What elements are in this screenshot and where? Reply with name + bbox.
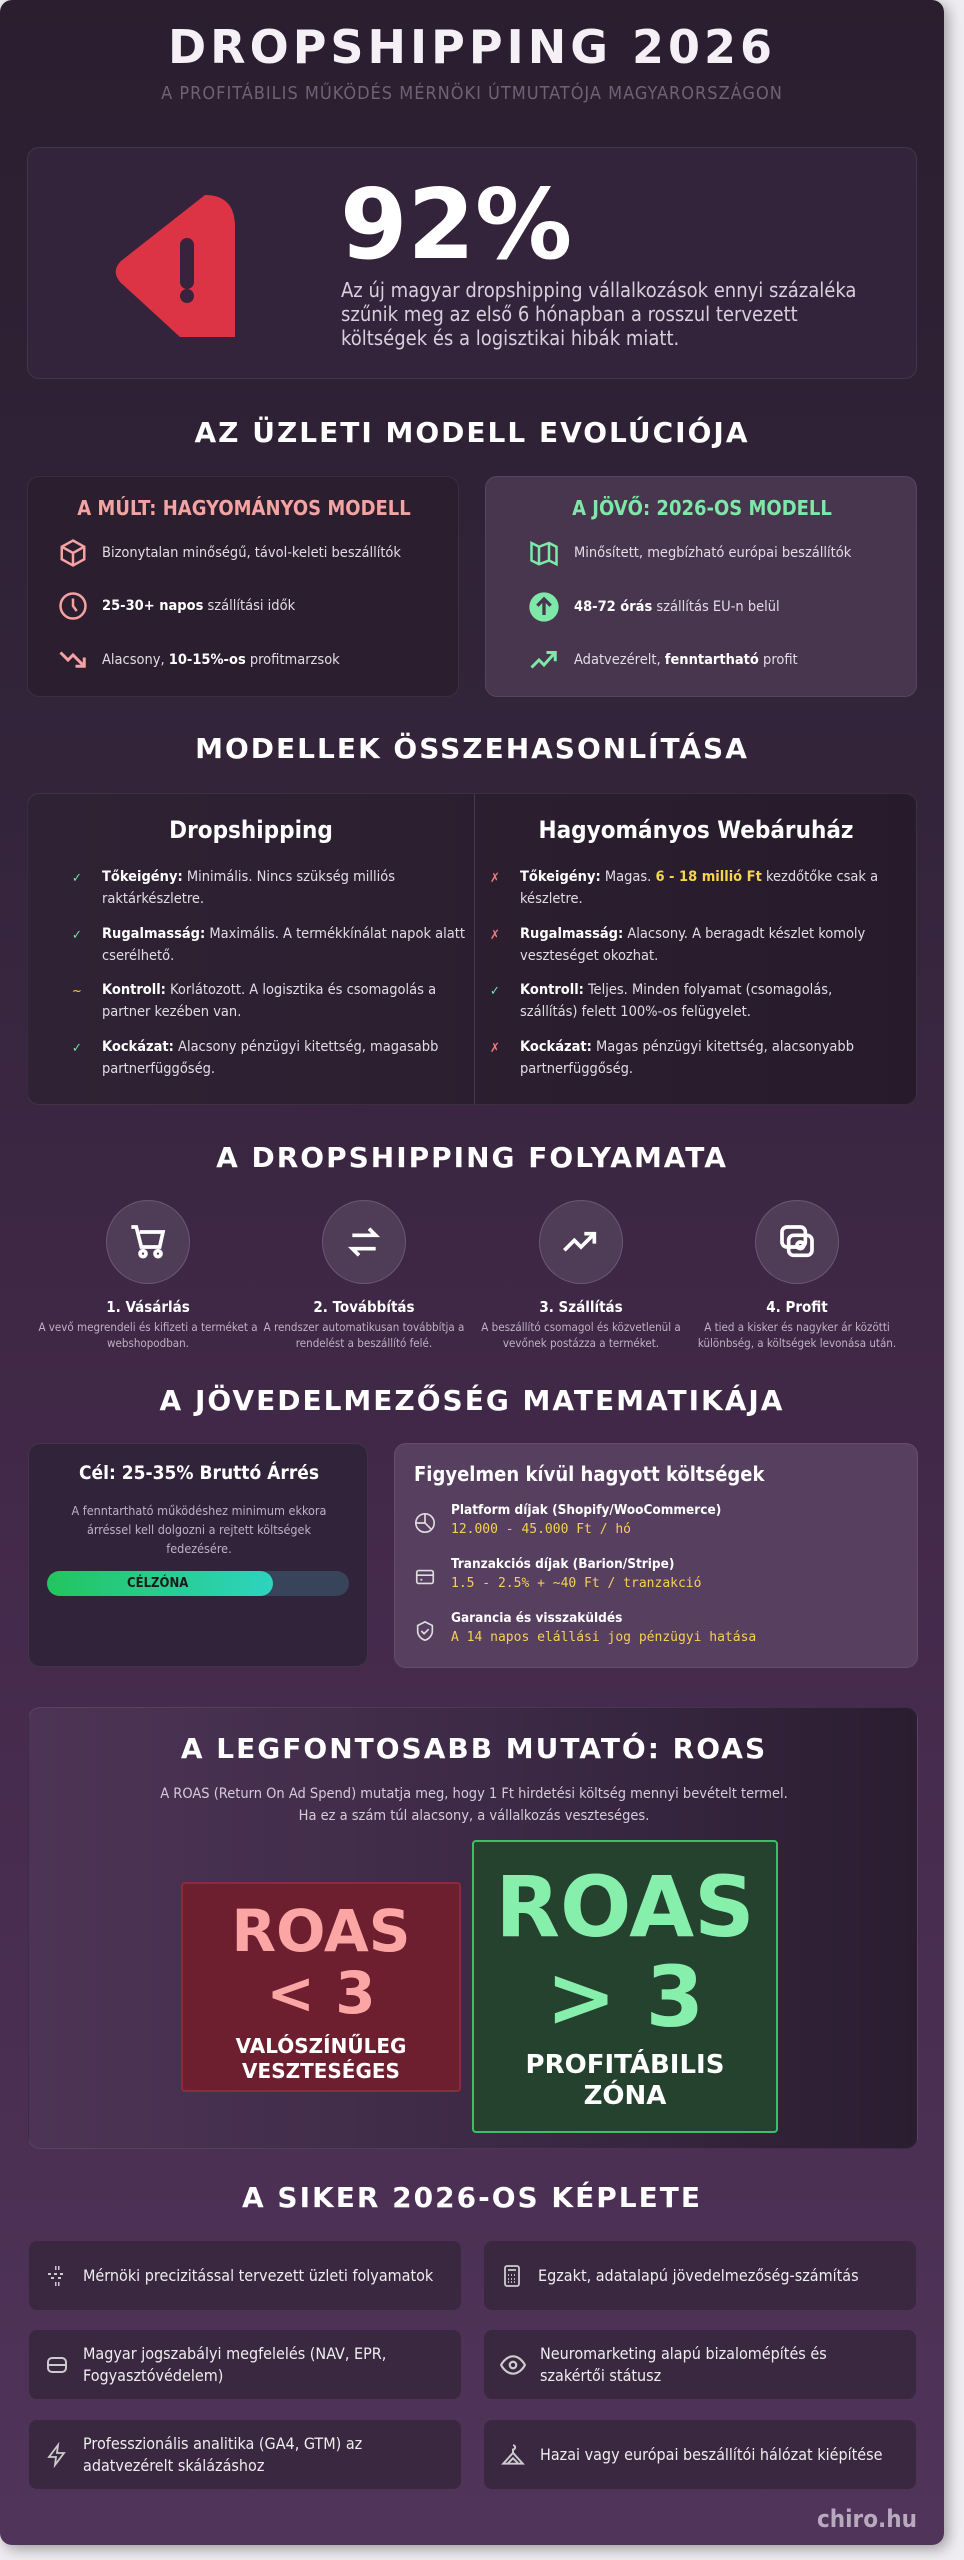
card 6	[484, 2420, 916, 2489]
ROAS description	[160, 1786, 788, 1824]
footer brand: chiro.hu	[817, 2505, 917, 2533]
heading old: A MÚLT: HAGYOMÁNYOS MODELL	[77, 496, 411, 520]
ROAS description: A ROAS (Return On Ad Spend) mutatja meg, hogy 1 Ft hirdetési költség mennyi bevételt termel.	[160, 1786, 788, 1802]
item old 2: 25-30+ napos szállítási idők	[102, 598, 295, 614]
panel: old model	[27, 476, 459, 697]
progress bar	[47, 1571, 349, 1596]
step 3	[481, 1200, 681, 1350]
card 3	[29, 2330, 461, 2399]
box: ROAS < 3	[181, 1882, 461, 2092]
panel: new model	[485, 476, 917, 697]
item: Rugalmasság: Maximális. A termékkínálat napok alatt cserélhető.	[102, 926, 465, 964]
goal title: Cél: 25-35% Bruttó Árrés	[79, 1462, 319, 1484]
column: dropshipping: ✓	[72, 928, 82, 943]
box: ROAS > 3: PROFITÁBILIS	[526, 2050, 724, 2080]
item: Rugalmasság: Alacsony. A beragadt készlet komoly veszteséget okozhat.	[520, 926, 865, 964]
step 4: A tied a kisker és nagyker ár közötti különbség, a költségek levonása után.	[698, 1320, 896, 1350]
column: dropshipping: ✓	[72, 871, 82, 886]
item old 1	[60, 539, 401, 567]
panel: hidden costs	[394, 1443, 918, 1668]
item old 3: Alacsony, 10-15%-os profitmarzsok	[102, 652, 340, 668]
step 3: 3. Szállítás	[539, 1298, 623, 1316]
item: Tőkeigény: Minimális. Nincs szükség milliós raktárkészletre.	[102, 869, 395, 907]
column heading: Dropshipping	[169, 816, 333, 844]
panel: margin goal	[28, 1443, 368, 1667]
card 2: Egzakt, adatalapú jövedelmezőség-számítás	[538, 2266, 859, 2284]
box: ROAS > 3: > 3	[546, 1948, 704, 2046]
item old 1: Bizonytalan minőségű, távol-keleti beszállítók	[102, 545, 401, 561]
heading: comparison: MODELLEK ÖSSZEHASONLÍTÁSA	[195, 732, 749, 765]
item: Kockázat: Magas pénzügyi kitettség, alacsonyabb partnerfüggőség.	[520, 1039, 854, 1077]
column: dropshipping: ~	[72, 984, 82, 999]
item new 2	[529, 592, 780, 622]
subtitle: A PROFITÁBILIS MŰKÖDÉS MÉRNÖKI ÚTMUTATÓJA MAGYARORSZÁGON	[161, 83, 783, 104]
ROAS description: Ha ez a szám túl alacsony, a vállalkozás veszteséges.	[299, 1808, 649, 1824]
column heading: Hagyományos Webáruház	[539, 816, 853, 844]
item new 2: 48-72 órás szállítás EU-n belül	[574, 599, 780, 615]
column: traditional	[490, 816, 878, 1077]
ROAS heading: A LEGFONTOSABB MUTATÓ: ROAS	[181, 1732, 767, 1765]
step 1: 1. Vásárlás	[106, 1298, 190, 1316]
stat number: 92%	[340, 168, 572, 281]
column: traditional: ✗	[490, 871, 500, 886]
item old 2	[59, 592, 296, 620]
card 1	[29, 2241, 461, 2310]
item new 1: Minősített, megbízható európai beszállítók	[574, 545, 851, 561]
stat description: Az új magyar dropshipping vállalkozások ennyi százaléka szűnik meg az első 6 hónapban a rosszul tervezett költségek és a logisztikai hibák miatt.	[341, 278, 856, 350]
icon: warning	[116, 195, 235, 337]
heading: success formula: A SIKER 2026-OS KÉPLETE	[242, 2181, 702, 2214]
item new 1	[530, 541, 852, 566]
column: traditional: ✗	[490, 928, 500, 943]
success cards	[29, 2241, 916, 2489]
title: DROPSHIPPING 2026	[168, 20, 776, 74]
step 1: A vevő megrendeli és kifizeti a terméket a webshopodban.	[38, 1320, 258, 1350]
item: Tőkeigény: Magas. 6 - 18 millió Ft kezdőtőke csak a készletre.	[520, 869, 878, 907]
card 4	[484, 2330, 916, 2399]
progress bar: CÉLZÓNA	[127, 1576, 188, 1591]
heading: profitability: A JÖVEDELMEZŐSÉG MATEMATIKÁJA	[160, 1384, 784, 1417]
cost 2: Tranzakciós díjak (Barion/Stripe)	[451, 1556, 674, 1572]
step 4	[698, 1200, 896, 1350]
item: Kockázat: Alacsony pénzügyi kitettség, magasabb partnerfüggőség.	[102, 1039, 438, 1077]
card 1: Mérnöki precizitással tervezett üzleti folyamatok	[83, 2266, 433, 2284]
step 2	[264, 1200, 464, 1350]
cost 3: Garancia és visszaküldés	[451, 1610, 622, 1626]
column: dropshipping: ✓	[72, 1041, 82, 1056]
item: Kontroll: Korlátozott. A logisztika és csomagolás a partner kezében van.	[102, 982, 436, 1020]
item new 3: Adatvezérelt, fenntartható profit	[574, 652, 798, 668]
box: ROAS < 3: VESZTESÉGES	[242, 2059, 400, 2083]
cost 1	[415, 1502, 721, 1537]
cost 2	[416, 1556, 701, 1591]
cost 2: 1.5 - 2.5% + ~40 Ft / tranzakció	[451, 1576, 701, 1591]
card 2	[484, 2241, 916, 2310]
column: traditional: ✓	[490, 984, 500, 999]
card 4: Neuromarketing alapú bizalomépítés és szakértői státusz	[540, 2344, 827, 2384]
box: ROAS < 3: < 3	[266, 1959, 376, 2027]
item: Kontroll: Teljes. Minden folyamat (csomagolás, szállítás) felett 100%-os felügyelet.	[520, 982, 832, 1020]
cost 1: Platform díjak (Shopify/WooCommerce)	[451, 1502, 721, 1518]
cost 1: 12.000 - 45.000 Ft / hó	[451, 1522, 631, 1537]
step 2: 2. Továbbítás	[313, 1298, 415, 1316]
box: ROAS > 3: ZÓNA	[584, 2081, 666, 2111]
process steps	[38, 1200, 896, 1350]
panel: 92% stat	[27, 147, 917, 379]
box: ROAS > 3: ROAS	[495, 1858, 755, 1956]
costs title: Figyelmen kívül hagyott költségek	[414, 1462, 764, 1486]
step 3: A beszállító csomagol és közvetlenül a vevőnek postázza a terméket.	[481, 1320, 681, 1350]
cost 3: A 14 napos elállási jog pénzügyi hatása	[451, 1630, 756, 1645]
box: ROAS < 3: ROAS	[231, 1897, 411, 1965]
panel: ROAS	[28, 1707, 918, 2149]
goal description: A fenntartható működéshez minimum ekkora árréssel kell dolgozni a rejtett költségek fedezésére.	[72, 1503, 326, 1556]
card 3: Magyar jogszabályi megfelelés (NAV, EPR, Fogyasztóvédelem)	[83, 2344, 386, 2384]
heading new: A JÖVŐ: 2026-OS MODELL	[572, 496, 832, 520]
card 5: Professzionális analitika (GA4, GTM) az adatvezérelt skálázáshoz	[83, 2434, 362, 2474]
column: traditional: ✗	[490, 1041, 500, 1056]
cost 3	[416, 1610, 756, 1645]
card 6: Hazai vagy európai beszállítói hálózat kiépítése	[540, 2444, 882, 2464]
box: ROAS > 3	[472, 1840, 778, 2133]
column: dropshipping	[72, 816, 465, 1077]
card 5	[29, 2420, 461, 2489]
heading: process: A DROPSHIPPING FOLYAMATA	[216, 1141, 728, 1174]
step 2: A rendszer automatikusan továbbítja a rendelést a beszállító felé.	[264, 1320, 464, 1350]
box: ROAS < 3: VALÓSZÍNŰLEG	[236, 2034, 406, 2058]
step 4: 4. Profit	[766, 1298, 828, 1316]
step 1	[38, 1200, 258, 1350]
panel: comparison	[27, 793, 917, 1105]
heading: evolution: AZ ÜZLETI MODELL EVOLÚCIÓJA	[194, 416, 750, 449]
